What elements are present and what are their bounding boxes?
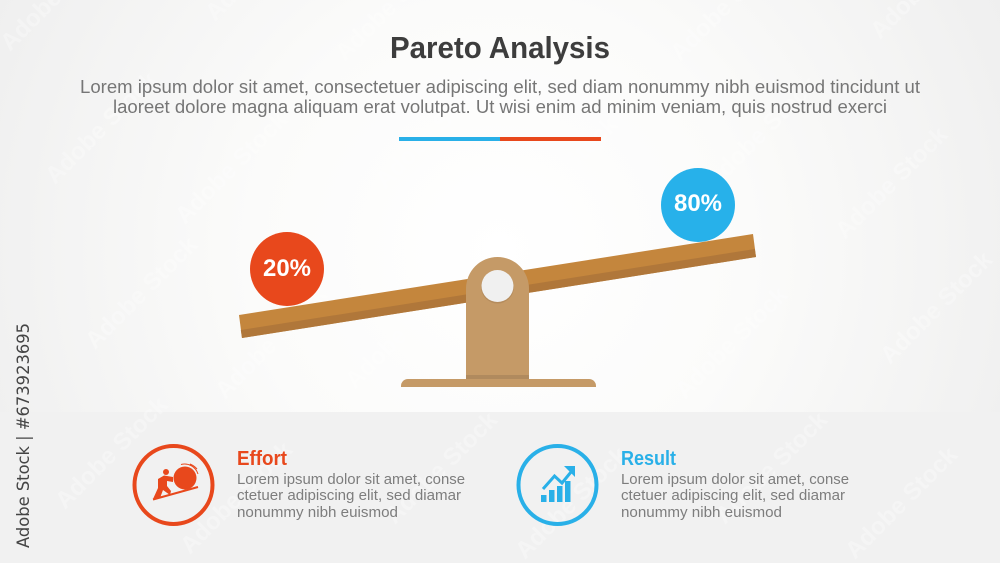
text: Adobe Stock: [175, 436, 298, 559]
subtitle text block: laoreet dolore magna aliquam erat volutpat. Ut wisi enim ad minim veniam, quis nostrud exerci: [113, 97, 887, 117]
effort description: [237, 471, 465, 521]
ball: 80% result: [661, 168, 735, 242]
icon: rising bar chart with arrow: [518, 446, 596, 524]
text: Adobe Stock: [340, 271, 463, 394]
heading: effort: Effort: [237, 448, 287, 470]
subtitle text block: [80, 77, 920, 117]
text: Adobe Stock: [50, 391, 173, 514]
result description: nonummy nibh euismod: [621, 504, 782, 521]
ball: 20% effort: 20%: [263, 255, 311, 282]
text: Adobe Stock: [370, 71, 493, 194]
result description: [621, 471, 849, 521]
stock credit: Adobe Stock | #673923695: [14, 323, 34, 548]
panel: result: [518, 446, 849, 524]
text: Adobe Stock: [210, 281, 333, 404]
heading: result: Result: [621, 448, 676, 470]
text: Adobe Stock: [710, 406, 833, 529]
result description: ctetuer adipiscing elit, sed diamar: [621, 487, 845, 504]
effort description: nonummy nibh euismod: [237, 504, 398, 521]
support post with pivot: [401, 257, 596, 387]
tilted wooden beam: [239, 234, 756, 338]
text: Adobe Stock: [830, 121, 953, 244]
text: Adobe Stock: [380, 406, 503, 529]
icon: person pushing boulder uphill: [134, 446, 212, 524]
panel: effort: [134, 446, 465, 524]
text: Adobe Stock: [80, 231, 203, 354]
subtitle text block: Lorem ipsum dolor sit amet, consectetuer adipiscing elit, sed diam nonummy nibh euismod tincidunt ut: [80, 77, 920, 97]
text: Adobe Stock: [670, 281, 793, 404]
text: Adobe Stock: [510, 441, 633, 563]
effort description: Lorem ipsum dolor sit amet, conse: [237, 471, 465, 488]
text: Adobe Stock: [840, 441, 963, 563]
text: Adobe Stock: [500, 111, 623, 234]
ball: 80% result: 80%: [674, 190, 722, 217]
result description: Lorem ipsum dolor sit amet, conse: [621, 471, 849, 488]
text: Adobe Stock: [170, 106, 293, 229]
divider: blue and red title underline: [399, 137, 601, 141]
text: Adobe Stock: [875, 246, 998, 369]
seesaw illustration: [239, 168, 756, 387]
effort description: ctetuer adipiscing elit, sed diamar: [237, 487, 461, 504]
ball: 20% effort: [250, 232, 324, 306]
text: Adobe Stock: [700, 71, 823, 194]
text: Adobe Stock: [40, 66, 163, 189]
title: Pareto Analysis: [390, 30, 610, 65]
text: Adobe Stock: [540, 241, 663, 364]
